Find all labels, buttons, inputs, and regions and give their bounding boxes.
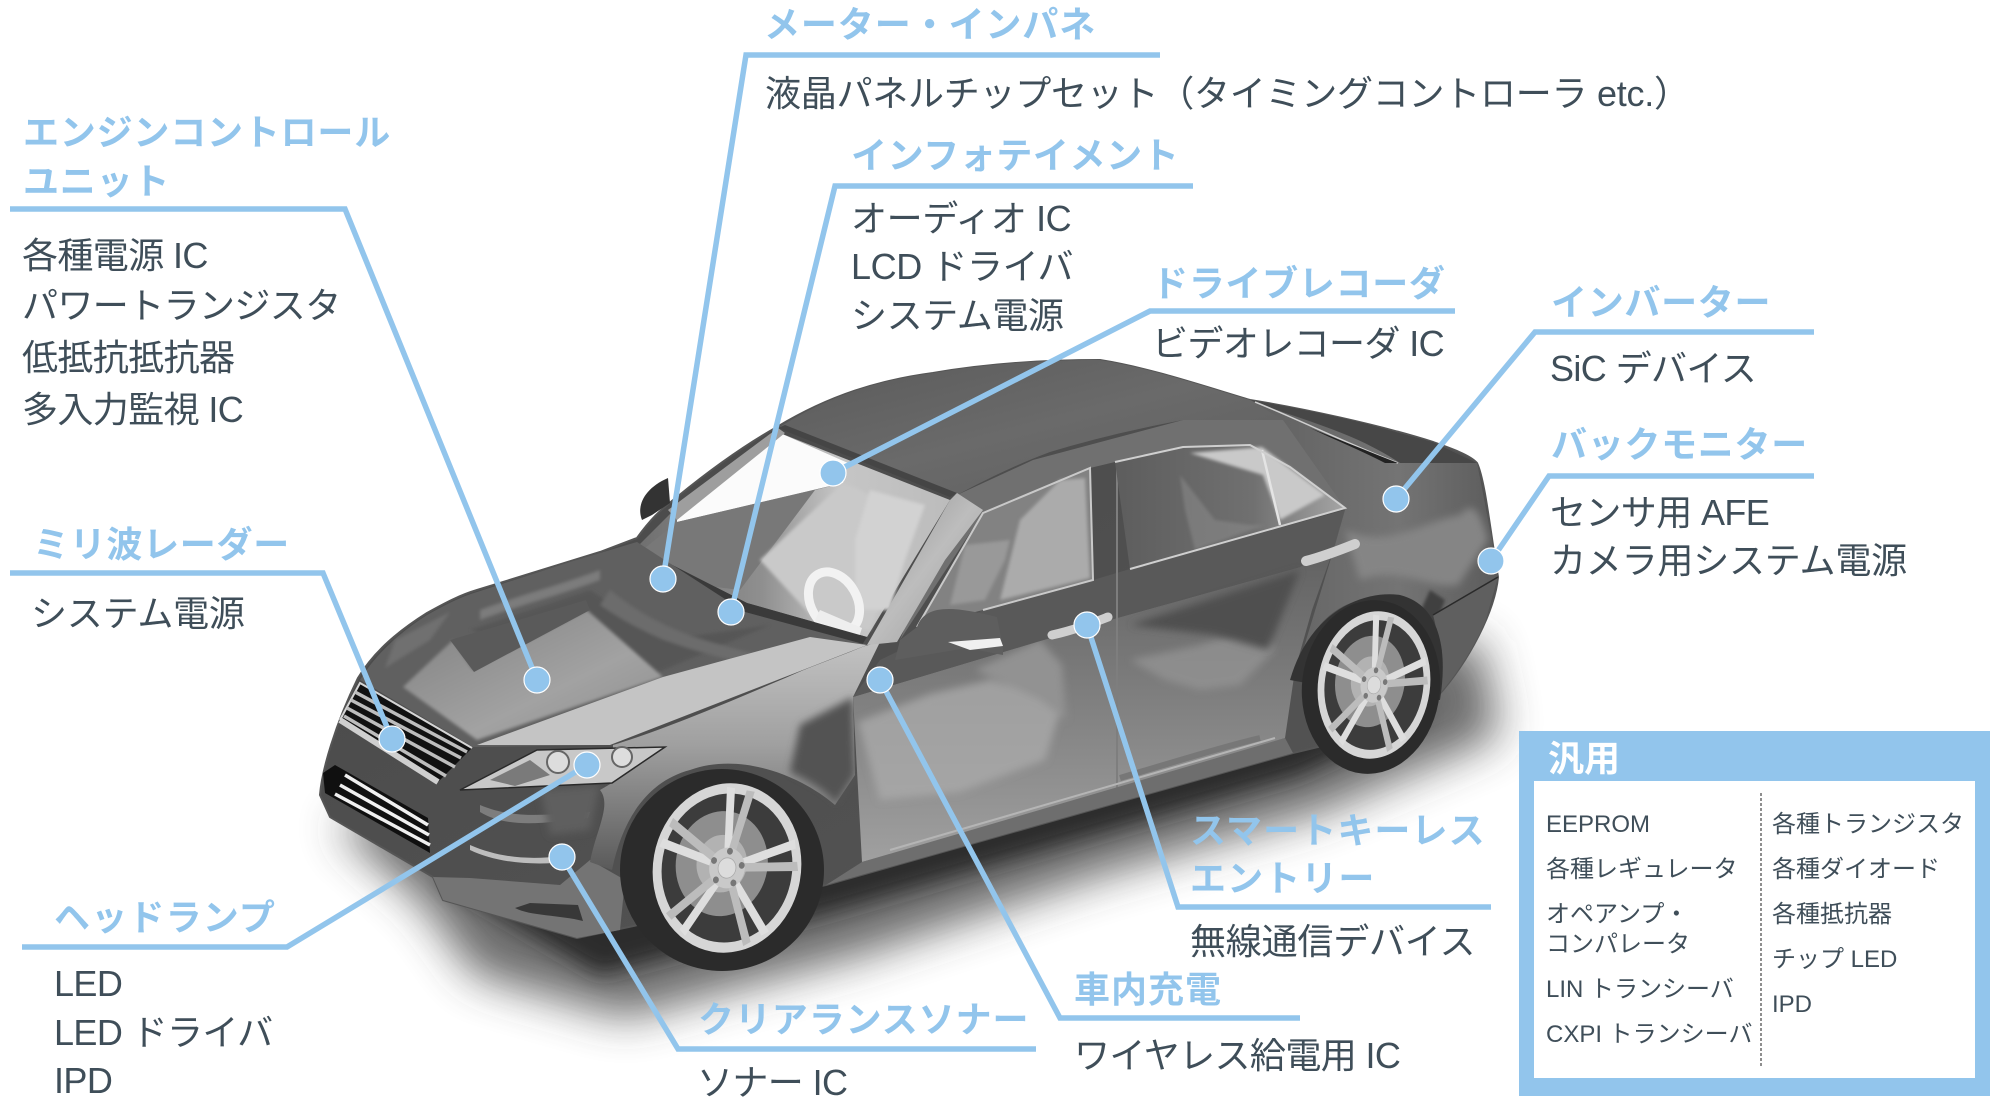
- text: engine control unit parts: 低抵抗抵抗器: [22, 337, 235, 378]
- panel: meter panel: [764, 4, 1690, 114]
- text: inverter parts: SiC デバイス: [1550, 348, 1756, 389]
- text: headlamp parts: LED: [54, 963, 122, 1004]
- text: smart keyless entry parts: 無線通信デバイス: [1190, 921, 1475, 962]
- text: general purpose left column: CXPI トランシーバ: [1546, 1021, 1752, 1048]
- rear door handle: [1306, 544, 1355, 561]
- heading: meter panel: メーター・インパネ: [764, 4, 1096, 45]
- lower front bumper: [433, 785, 625, 938]
- text: general purpose right column: 各種トランジスタ: [1772, 811, 1964, 838]
- heading: in-cabin charging: 車内充電: [1074, 969, 1222, 1010]
- heading: millimeter radar: ミリ波レーダー: [33, 524, 290, 565]
- panel: clearance sonar: [697, 999, 1029, 1103]
- a-pillar left: [668, 428, 785, 520]
- text: general purpose left column: LIN トランシーバ: [1546, 976, 1734, 1003]
- heading: infotainment: インフォテイメント: [851, 135, 1179, 176]
- text: engine control unit parts: パワートランジスタ: [22, 285, 341, 326]
- text: infotainment parts: システム電源: [851, 295, 1064, 336]
- panel: in-cabin charging: [1074, 969, 1400, 1076]
- front seat seen through door: [858, 640, 1066, 800]
- panel: infotainment: [851, 135, 1179, 336]
- text: headlamp parts: IPD: [54, 1060, 112, 1101]
- car body: [320, 360, 1498, 938]
- heading: smart keyless entry: スマートキーレス: [1190, 810, 1486, 851]
- panel: back monitor: [1550, 424, 1907, 581]
- front door handle: [1052, 617, 1108, 635]
- heading: headlamp: ヘッドランプ: [54, 897, 276, 938]
- text: meter panel parts: 液晶パネルチップセット（タイミングコントローラ etc.）: [765, 73, 1690, 114]
- leader: inverter: [1396, 332, 1814, 499]
- panel: inverter: [1550, 282, 1771, 389]
- heading: clearance sonar: クリアランスソナー: [698, 999, 1029, 1040]
- side lower door panels: [853, 545, 1335, 862]
- heading: general purpose: 汎用: [1548, 738, 1620, 779]
- front fender: [590, 642, 880, 870]
- heading: smart keyless entry: エントリー: [1190, 858, 1376, 899]
- hood: [360, 542, 867, 747]
- panel: smart keyless entry: [1190, 810, 1486, 962]
- leader: engine control unit: [10, 209, 537, 680]
- door upper band: [853, 510, 1345, 697]
- front wheel: [620, 769, 824, 971]
- heading: drive recorder: ドライブレコーダ: [1152, 263, 1446, 304]
- leader: back monitor: [1491, 476, 1814, 561]
- text: general purpose right column: IPD: [1772, 991, 1812, 1018]
- leader: headlamp: [22, 765, 587, 947]
- panel: headlamp: [54, 897, 276, 1101]
- panel frame: [1519, 731, 1990, 1096]
- side sill: [826, 738, 1293, 885]
- divider: [1760, 793, 1762, 1067]
- heading: back monitor: バックモニター: [1551, 424, 1808, 465]
- leader: infotainment: [731, 186, 1193, 612]
- panel: drive recorder: [1152, 263, 1446, 364]
- right side mirror: [895, 609, 1003, 660]
- text: headlamp parts: LED ドライバ: [54, 1012, 273, 1053]
- text: millimeter radar parts: システム電源: [31, 593, 245, 634]
- headlight: [460, 747, 665, 790]
- hood light reflection: [477, 637, 867, 745]
- text: infotainment parts: LCD ドライバ: [851, 246, 1073, 287]
- front side window: [917, 468, 1093, 627]
- car illustration: [320, 360, 1500, 1018]
- leader: in-cabin charging: [880, 680, 1300, 1018]
- text: general purpose left column: オペアンプ・: [1546, 901, 1688, 928]
- leader: smart keyless entry: [1087, 625, 1491, 907]
- rear wheel: [1290, 593, 1449, 781]
- lower grille: [323, 765, 430, 853]
- text: general purpose right column: 各種ダイオード: [1772, 856, 1940, 883]
- rear quarter panel: [1252, 401, 1497, 646]
- leader: meter panel: [663, 55, 1160, 579]
- text: engine control unit parts: 多入力監視 IC: [22, 389, 243, 430]
- rear bumper: [1433, 577, 1498, 697]
- panel: engine control unit: [22, 112, 391, 430]
- text: general purpose left column: 各種レギュレータ: [1546, 856, 1738, 883]
- steering wheel: [798, 563, 870, 641]
- roof side rail: [900, 420, 1345, 640]
- heading: engine control unit: ユニット: [23, 161, 170, 202]
- heading: engine control unit: エンジンコントロール: [23, 112, 391, 153]
- text: clearance sonar parts: ソナー IC: [697, 1062, 847, 1103]
- left side mirror: [640, 478, 670, 520]
- heading: inverter: インバーター: [1551, 282, 1771, 323]
- leader: drive recorder: [833, 311, 1455, 473]
- text: general purpose right column: 各種抵抗器: [1772, 901, 1892, 928]
- trunk lid: [1250, 400, 1477, 463]
- text: back monitor parts: カメラ用システム電源: [1550, 540, 1907, 581]
- leader: clearance sonar: [562, 857, 1036, 1049]
- upper grille: [340, 683, 472, 782]
- panel: general purpose: [1519, 731, 1990, 1096]
- door seam: [1116, 462, 1118, 795]
- leader: millimeter radar: [10, 573, 392, 739]
- text: general purpose left column: コンパレータ: [1546, 931, 1690, 958]
- panel: millimeter radar: [31, 524, 290, 634]
- callout dots: [379, 460, 1504, 870]
- a-pillar right: [867, 493, 983, 645]
- text: general purpose left column: EEPROM: [1546, 811, 1650, 838]
- text: engine control unit parts: 各種電源 IC: [22, 235, 208, 276]
- windshield: [632, 425, 957, 645]
- roof: [778, 360, 1283, 495]
- text: back monitor parts: センサ用 AFE: [1550, 492, 1769, 533]
- text: in-cabin charging parts: ワイヤレス給電用 IC: [1074, 1035, 1400, 1076]
- rear seat seen through door: [1130, 625, 1275, 690]
- text: general purpose right column: チップ LED: [1772, 946, 1897, 973]
- text: drive recorder parts: ビデオレコーダ IC: [1152, 323, 1444, 364]
- text: infotainment parts: オーディオ IC: [851, 198, 1071, 239]
- ground shadow: [335, 640, 1500, 1018]
- rear side window: [1115, 445, 1345, 569]
- front cowl: [632, 547, 867, 645]
